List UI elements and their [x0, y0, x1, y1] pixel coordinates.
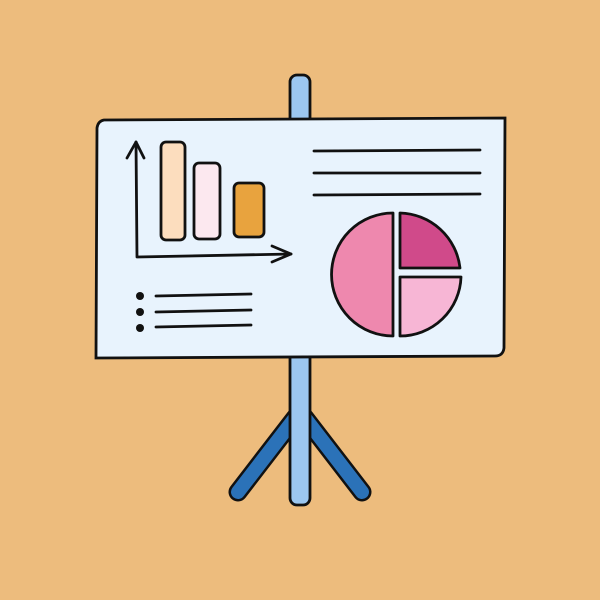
- bar chart: [127, 142, 291, 262]
- pie chart: [332, 213, 461, 336]
- bullet list: [136, 292, 251, 332]
- board: [96, 118, 505, 358]
- stand legs: [238, 418, 362, 492]
- text lines top right: [314, 150, 480, 195]
- stand pole: [290, 75, 310, 505]
